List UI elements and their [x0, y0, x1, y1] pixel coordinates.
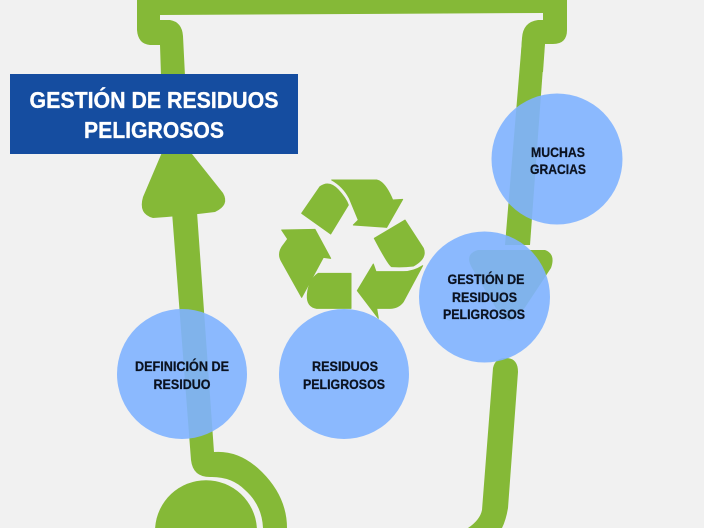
bin right stem	[505, 40, 545, 245]
recycle block bottom	[307, 273, 351, 308]
circle: definición de residuo	[117, 309, 247, 439]
bin rim with lugs	[137, 0, 567, 76]
circle: gestión de residuos peligrosos	[419, 232, 550, 362]
recycle block right	[374, 220, 424, 267]
title box	[10, 74, 298, 154]
title text: GESTIÓN DE RESIDUOS	[30, 86, 278, 113]
circle: muchas gracias: GRACIAS	[530, 162, 586, 177]
recycle arrow left	[280, 229, 331, 297]
recycle arrow top	[332, 180, 403, 227]
icon: recycling bin outline	[137, 0, 567, 528]
icon: recycling symbol	[280, 180, 424, 318]
circle: gestión de residuos peligrosos: RESIDUOS	[452, 290, 517, 305]
circle: gestión de residuos peligrosos: GESTIÓN DE	[448, 272, 524, 287]
bin left arrow head	[142, 150, 225, 218]
circle: residuos peligrosos: PELIGROSOS	[303, 377, 385, 392]
bin lower right stem	[468, 358, 518, 528]
circle: residuos peligrosos	[279, 309, 409, 439]
circle: muchas gracias	[492, 94, 622, 224]
title banner	[10, 74, 298, 154]
recycle arrow bottom	[357, 264, 423, 318]
circle: gestión de residuos peligrosos: PELIGROSOS	[443, 307, 525, 322]
circle: residuos peligrosos: RESIDUOS	[312, 359, 378, 374]
title second line: PELIGROSOS	[84, 117, 224, 143]
circle: definición de residuo: RESIDUO	[154, 377, 210, 392]
bin right arrow head	[469, 250, 553, 320]
recycle block top left	[302, 184, 348, 234]
circle: definición de residuo: DEFINICIÓN DE	[135, 359, 229, 374]
bin left stem and lower curve	[172, 212, 287, 528]
circle: muchas gracias: MUCHAS	[531, 145, 585, 160]
bin wheel	[155, 480, 257, 528]
